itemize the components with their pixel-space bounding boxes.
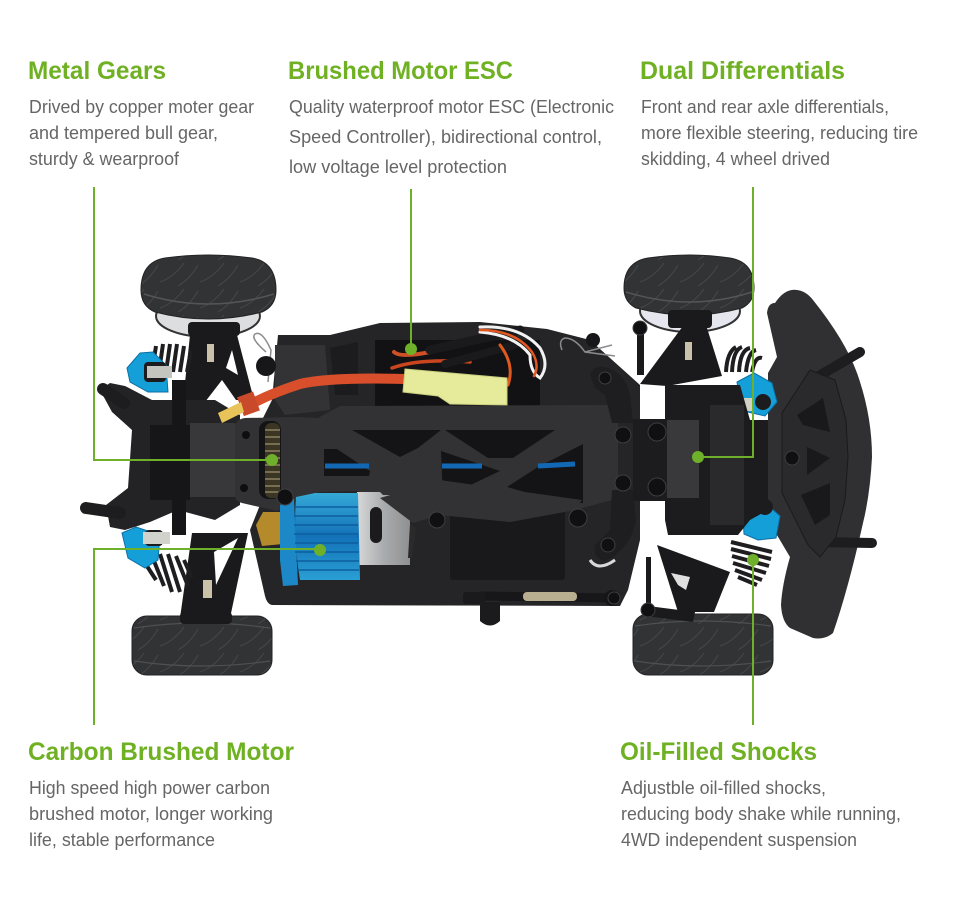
body clips — [254, 333, 615, 566]
spur gear — [265, 423, 280, 498]
panel: Carbon Brushed Motor: life, stable performance — [29, 829, 215, 850]
shocks: springs — [143, 344, 772, 592]
shock mount pins — [143, 362, 773, 546]
front bumper plate — [782, 370, 848, 557]
ESC bay — [375, 340, 540, 410]
plate holes — [240, 431, 250, 492]
screws — [277, 321, 799, 617]
panel: Metal Gears: and tempered bull gear, — [29, 122, 218, 143]
panel: Dual Differentials: Dual Differentials — [640, 57, 845, 85]
suspension arms, rear — [180, 322, 254, 624]
panel: Brushed Motor ESC: Brushed Motor ESC — [288, 57, 513, 85]
carbon plate lower overlap — [380, 480, 582, 523]
panel: Carbon Brushed Motor: Carbon Brushed Motor — [28, 738, 294, 766]
wheel: front bottom — [633, 614, 773, 675]
callout line: Carbon Brushed Motor — [94, 544, 326, 725]
panel: Metal Gears: Metal Gears — [28, 57, 166, 85]
wheel: rear bottom — [132, 616, 272, 675]
chassis tub — [250, 322, 640, 606]
carbon top plate — [235, 405, 618, 523]
panel: Dual Differentials: more flexible steering, reducing tire — [641, 122, 918, 143]
panel: Oil-Filled Shocks: reducing body shake while running, — [621, 803, 901, 824]
panel: Dual Differentials: skidding, 4 wheel drived — [641, 148, 830, 169]
panel: Carbon Brushed Motor: High speed high power carbon — [29, 777, 270, 798]
car chassis illustration — [86, 255, 872, 675]
callout line: Metal Gears — [94, 187, 278, 466]
panel: Oil-Filled Shocks — [620, 738, 901, 850]
panel: Dual Differentials — [640, 57, 918, 169]
callout line: Brushed Motor ESC — [405, 189, 417, 355]
panel: Oil-Filled Shocks: Oil-Filled Shocks — [620, 738, 817, 766]
panel: Dual Differentials: Front and rear axle differentials, — [641, 96, 889, 117]
shocks: blue hex nuts — [122, 352, 780, 568]
panel: Oil-Filled Shocks: Adjustble oil-filled shocks, — [621, 777, 826, 798]
foam bumper — [767, 290, 872, 638]
steering rod — [463, 590, 620, 626]
clip balls — [256, 333, 600, 376]
yellow battery connector — [403, 369, 507, 405]
panel: Brushed Motor ESC: low voltage level protection — [289, 156, 507, 177]
panel: Oil-Filled Shocks: 4WD independent suspension — [621, 829, 857, 850]
front gearbox — [633, 385, 768, 535]
red battery wire and plug — [218, 379, 405, 423]
wheel: front top — [624, 255, 754, 332]
servo — [450, 505, 565, 580]
red wire in cutout — [420, 428, 436, 450]
ESC wires — [392, 327, 545, 385]
wheel: rear top — [141, 255, 276, 337]
brushed motor — [256, 492, 416, 586]
callout line: Dual Differentials — [692, 187, 753, 463]
panel: Carbon Brushed Motor — [28, 738, 294, 850]
panel: Brushed Motor ESC — [288, 57, 614, 177]
panel: Metal Gears: Drived by copper moter gear — [29, 96, 254, 117]
plate cutouts — [259, 421, 583, 503]
chassis left wall — [275, 345, 330, 415]
panel: Brushed Motor ESC: Quality waterproof motor ESC (Electronic — [289, 96, 614, 117]
front steering arm — [590, 367, 636, 561]
posts — [86, 352, 872, 543]
panel: Metal Gears — [28, 57, 254, 169]
panel: Metal Gears: sturdy & wearproof — [29, 148, 180, 169]
panel: Brushed Motor ESC: Speed Controller), bidirectional control, — [289, 126, 602, 147]
blue drive shaft — [325, 464, 575, 466]
callout line: Oil-Filled Shocks — [747, 554, 759, 725]
panel: Carbon Brushed Motor: brushed motor, longer working — [29, 803, 273, 824]
rear shock tower — [100, 383, 240, 530]
suspension arms, front — [637, 310, 730, 622]
